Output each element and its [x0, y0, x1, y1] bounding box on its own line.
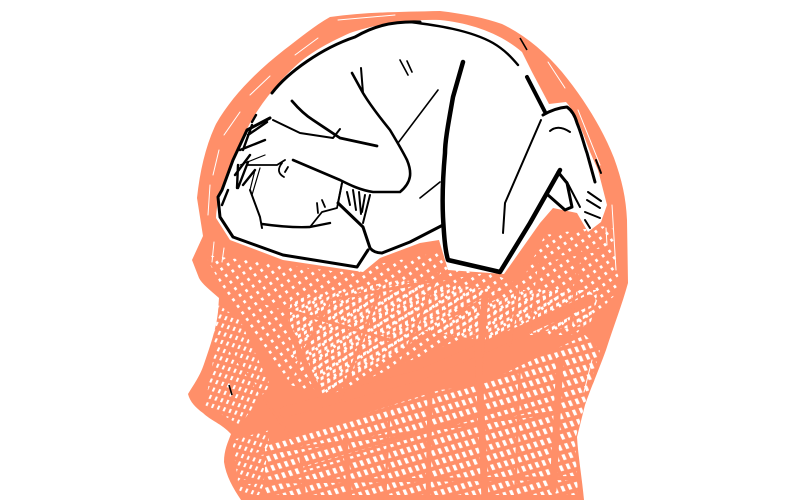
- forearm: [292, 101, 377, 146]
- shoulder tick: [361, 68, 363, 93]
- neck hatching: [338, 183, 370, 223]
- head silhouette: [188, 11, 628, 500]
- illustration: head with curled figure: [188, 11, 628, 500]
- back contour: [272, 22, 420, 93]
- cheek: [250, 190, 262, 228]
- knee contour: [543, 107, 595, 182]
- upper arm: [293, 73, 410, 192]
- hair: [222, 115, 267, 205]
- jaw: [262, 223, 330, 227]
- foot: [548, 172, 572, 210]
- foot edge: [567, 182, 580, 207]
- eye and nose: [317, 200, 325, 213]
- shin inner line: [503, 120, 541, 233]
- face profile: [310, 183, 342, 227]
- head back and lower contour: [218, 118, 368, 267]
- crosshatching: [205, 15, 620, 500]
- figure: black line work: [218, 22, 601, 272]
- knee arc: [550, 128, 570, 132]
- rim streaks: [208, 15, 616, 392]
- figure: white body area: [216, 20, 607, 274]
- hair thin strands: [240, 155, 265, 195]
- ear: [247, 160, 288, 177]
- shoulder of thigh: [527, 77, 545, 112]
- small black marks: [229, 38, 527, 395]
- spine and thigh thick line: [443, 62, 560, 272]
- solid bands: [230, 250, 600, 500]
- upper arm lower edge: [273, 120, 340, 138]
- belly line: [338, 203, 443, 253]
- upper back contour right: [410, 22, 518, 65]
- torso marks: [398, 60, 440, 198]
- toes: [585, 160, 601, 228]
